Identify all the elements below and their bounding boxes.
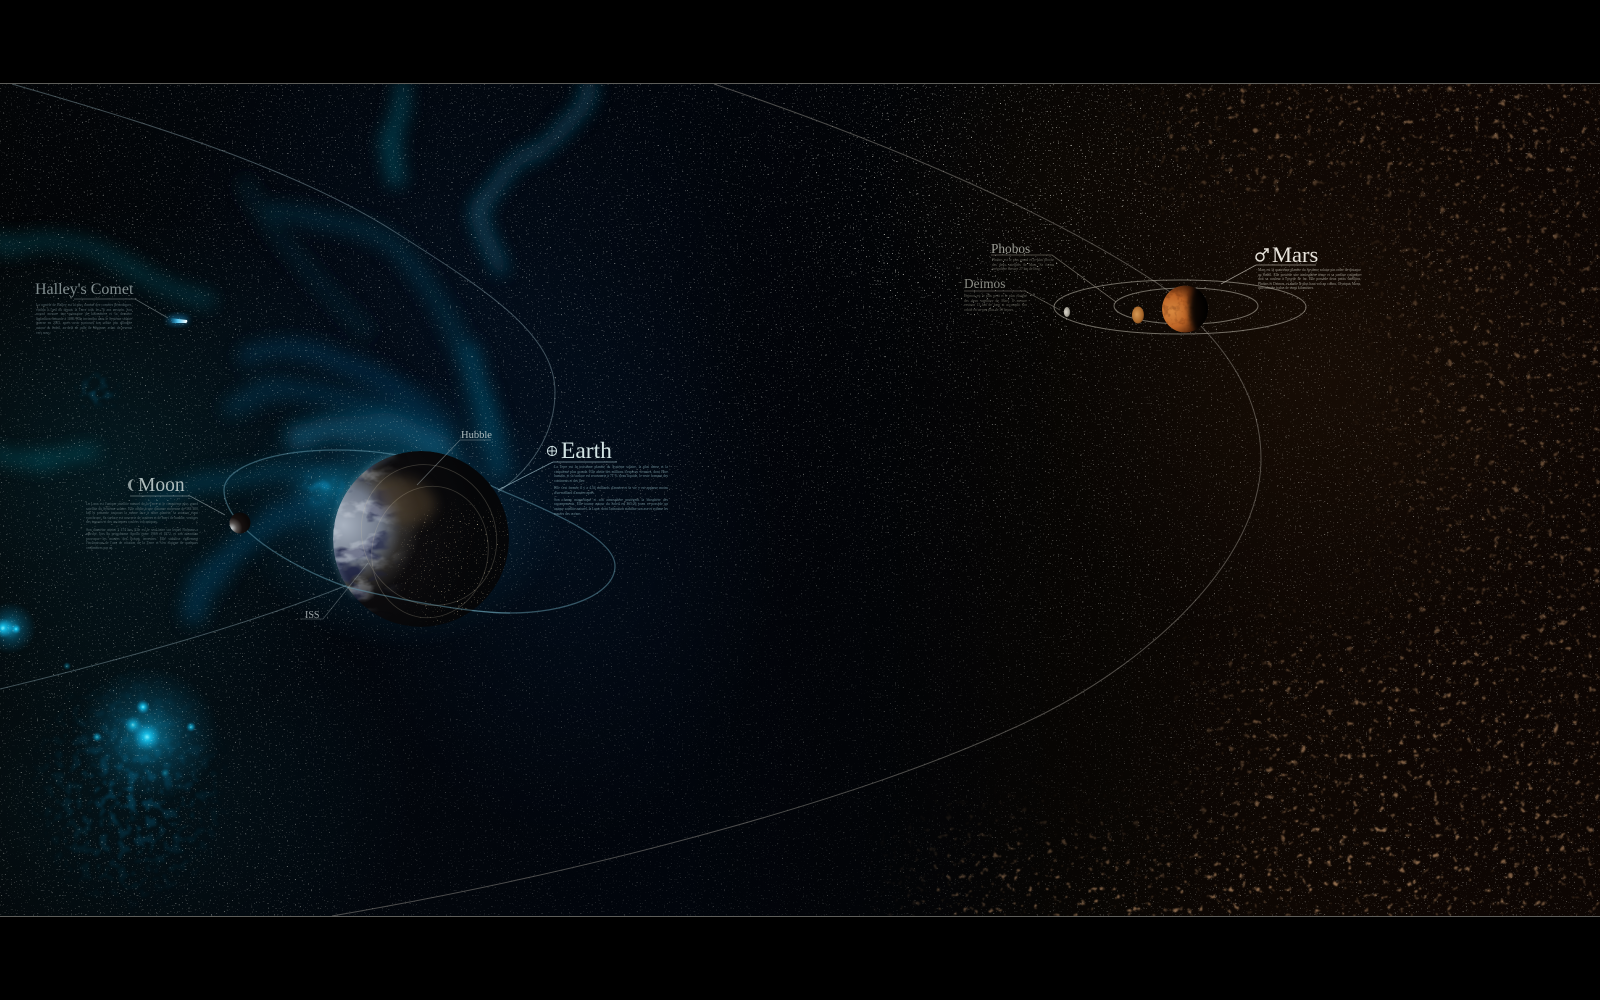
label: Deimos <box>964 276 1027 312</box>
label: Earth: Earth <box>561 438 612 464</box>
label: Earth: La Terre est la troisième planète du Système solaire, la plus dense et la cinquième plus grande. Elle abrite des millions d'espèces vivantes, dont l'être humain, et sa surface est recouverte à 71 % d'eau liquide, le reste formant des continents et des îles. <box>554 465 668 483</box>
orbit: Mars around the Sun <box>332 84 1261 916</box>
orbit: Moon around Earth, near side <box>347 587 510 613</box>
orbit: Moon around Earth, far side <box>224 450 615 613</box>
label: ISS: ISS <box>305 610 319 621</box>
leader lines <box>74 255 1316 619</box>
label: Earth: Elle s'est formée il y a 4,54 milliards d'années et la vie y est apparue moins d'un milliard d'années après. <box>554 486 668 495</box>
label: Phobos: Phobos <box>991 241 1030 256</box>
label: Phobos: Phobos est le plus grand et le plus proche des deux satellites de Mars. Sa forme irrégulière mesure 27 km de long. <box>992 258 1054 271</box>
label: Mars: Mars est la quatrième planète du Système solaire par ordre de distance au Soleil. Elle possède une atmosphère ténue et sa surface rougeâtre doit sa couleur à l'oxyde de fer. Elle possède deux petits satellites, Phobos et Deimos, et abrite le plus haut volcan connu, Olympus Mons, qui culmine à plus de vingt kilomètres. <box>1258 268 1361 290</box>
label: Phobos <box>991 241 1054 271</box>
Moon <box>230 512 250 534</box>
orbit: Halley's Comet <box>0 84 555 689</box>
Phobos <box>1132 306 1144 324</box>
icon: Earth symbol <box>547 446 557 456</box>
label: Mars <box>1258 242 1361 290</box>
label: Hubble: Hubble <box>461 430 492 441</box>
icon: Moon crescent <box>128 479 134 491</box>
nebula: glow behind Earth <box>82 374 530 626</box>
label: Deimos: Deimos <box>964 276 1005 291</box>
label: Deimos: Deimos est le plus petit et le plus éloigné des deux satellites de Mars. Il mesure environ 15 km de long et accomplit son orbite en un peu plus de 30 heures. <box>964 294 1027 312</box>
Earth atmosphere rim <box>333 455 395 597</box>
Mars orbit rings: Phobos and Deimos <box>1054 280 1306 334</box>
nebula: blue wisps around Earth <box>0 84 590 610</box>
label: Moon <box>86 475 198 550</box>
orbit: Hubble and ISS around Earth <box>361 464 498 618</box>
icon: Mars symbol <box>1256 249 1268 261</box>
label: Earth <box>554 438 668 516</box>
asteroid belt <box>850 84 1600 916</box>
text: Son champ magnétique et son atmosphère protègent la biosphère des rayonnements. Elle tourne autour du Soleil en 365,26 jours et possède un unique satellite naturel, la Lune, dont l'attraction stabilise son axe et rythme les marées des océans. <box>554 498 668 516</box>
label: Moon: Moon <box>138 475 185 496</box>
Deimos <box>1064 307 1070 317</box>
label: Halley's Comet <box>35 281 134 335</box>
label: Halley's Comet: Halley's Comet <box>35 281 133 298</box>
star cluster: bright cyan nebula bottom left <box>0 604 214 888</box>
Halley's Comet <box>167 315 189 325</box>
label: Mars: Mars <box>1272 242 1318 267</box>
label: Moon: La Lune est l'unique satellite naturel de la Terre et le cinquième plus grand satellite du Système solaire. Elle orbite à une distance moyenne de 384 400 km et présente toujours la même face à notre planète, sa rotation étant synchrone. Sa surface est couverte de cratères et de mers de basalte, vestiges des impacts et des anciennes coulées volcaniques. <box>86 502 198 524</box>
planet: Mars <box>1162 286 1208 332</box>
label: Moon: Son diamètre atteint 3 474 km. Elle est le seul astre sur lequel l'homme a marché, lors du programme Apollo entre 1969 et 1972, et son attraction provoque les marées des océans terrestres. Elle stabilise également l'inclinaison de l'axe de rotation de la Terre et s'en éloigne de quelques centimètres par an. <box>86 528 198 550</box>
planet: Earth <box>333 451 509 627</box>
label: Halley's Comet: La comète de Halley est la plus connue des comètes périodiques, visible à l'œil nu depuis la Terre tous les 76 ans environ. Son noyau mesure une quinzaine de kilomètres et sa dernière apparition remonte à 1986. Elle reviendra dans le Système solaire interne en 2061, après avoir parcouru son orbite très allongée autour du Soleil, au-delà de celle de Neptune, avant de revenir vers nous. <box>36 303 132 335</box>
